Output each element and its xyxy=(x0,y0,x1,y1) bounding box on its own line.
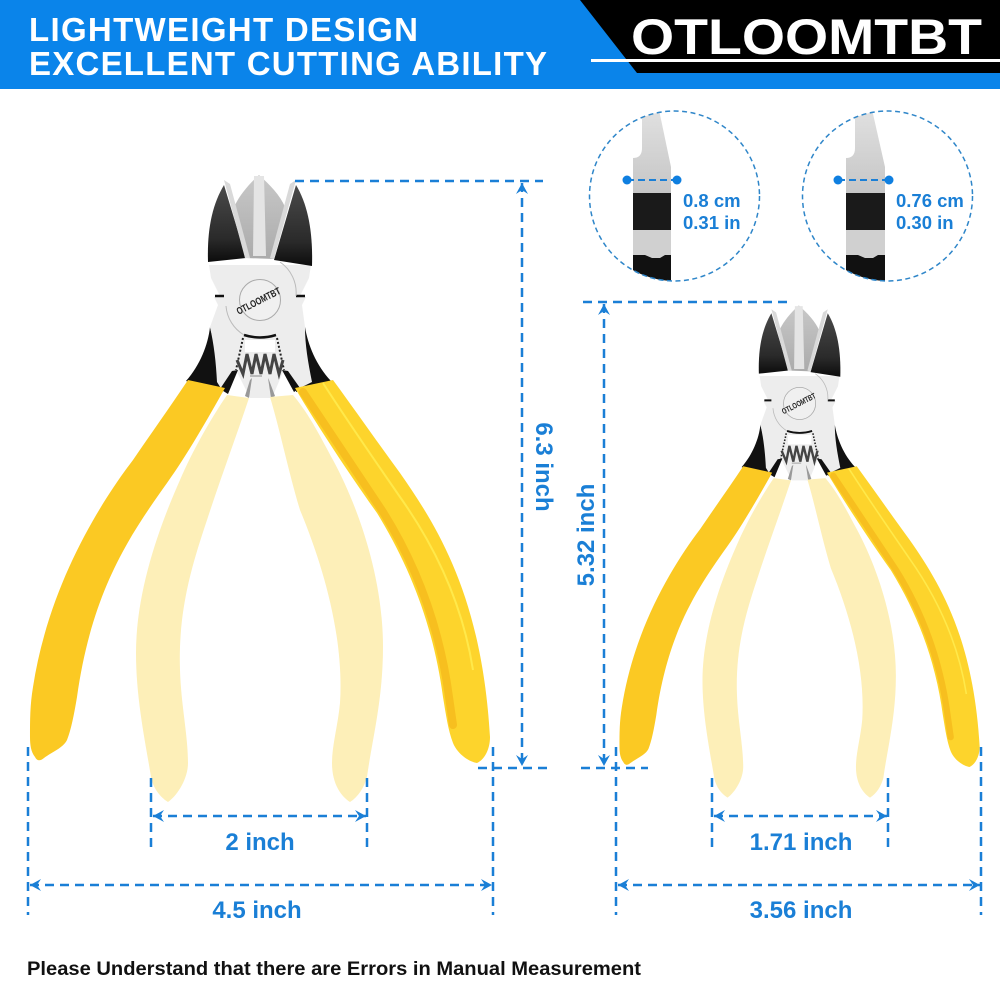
small jaw width label xyxy=(896,190,964,233)
dimension labels: 3.56 inch xyxy=(750,897,852,924)
small pliers xyxy=(619,305,980,798)
large pliers logo: OTLOOMTBT xyxy=(235,286,283,318)
headline: LIGHTWEIGHT DESIGN xyxy=(29,11,418,48)
header band xyxy=(0,0,1000,89)
footer note: Please Understand that there are Errors in Manual Measurement xyxy=(27,959,642,980)
jaw width label: 0.8 cm xyxy=(683,190,741,211)
headline: EXCELLENT CUTTING ABILITY xyxy=(29,45,547,82)
dimension labels xyxy=(212,422,852,924)
dimension labels: 1.71 inch xyxy=(750,829,852,856)
brand black banner xyxy=(580,0,1000,73)
dimension labels: 2 inch xyxy=(225,829,295,856)
brand underline xyxy=(591,59,1000,62)
brand logo: OTLOOMTBT xyxy=(631,9,982,65)
small jaw width label: 0.30 in xyxy=(896,212,954,233)
dimension labels: 6.3 inch xyxy=(530,422,557,512)
jaw width label xyxy=(683,190,741,233)
small jaw width label: 0.76 cm xyxy=(896,190,964,211)
dimension lines: large pliers xyxy=(28,181,547,915)
dimension lines: small pliers xyxy=(581,302,981,915)
dimension labels: 5.32 inch xyxy=(573,484,600,586)
jaw width label: 0.31 in xyxy=(683,212,741,233)
detail circle: large jaw width xyxy=(590,105,760,290)
dimension labels: 4.5 inch xyxy=(212,897,302,924)
headline xyxy=(29,11,547,82)
detail circle: small jaw width xyxy=(802,105,972,290)
small pliers logo: OTLOOMTBT xyxy=(780,391,817,416)
large pliers xyxy=(30,175,490,802)
